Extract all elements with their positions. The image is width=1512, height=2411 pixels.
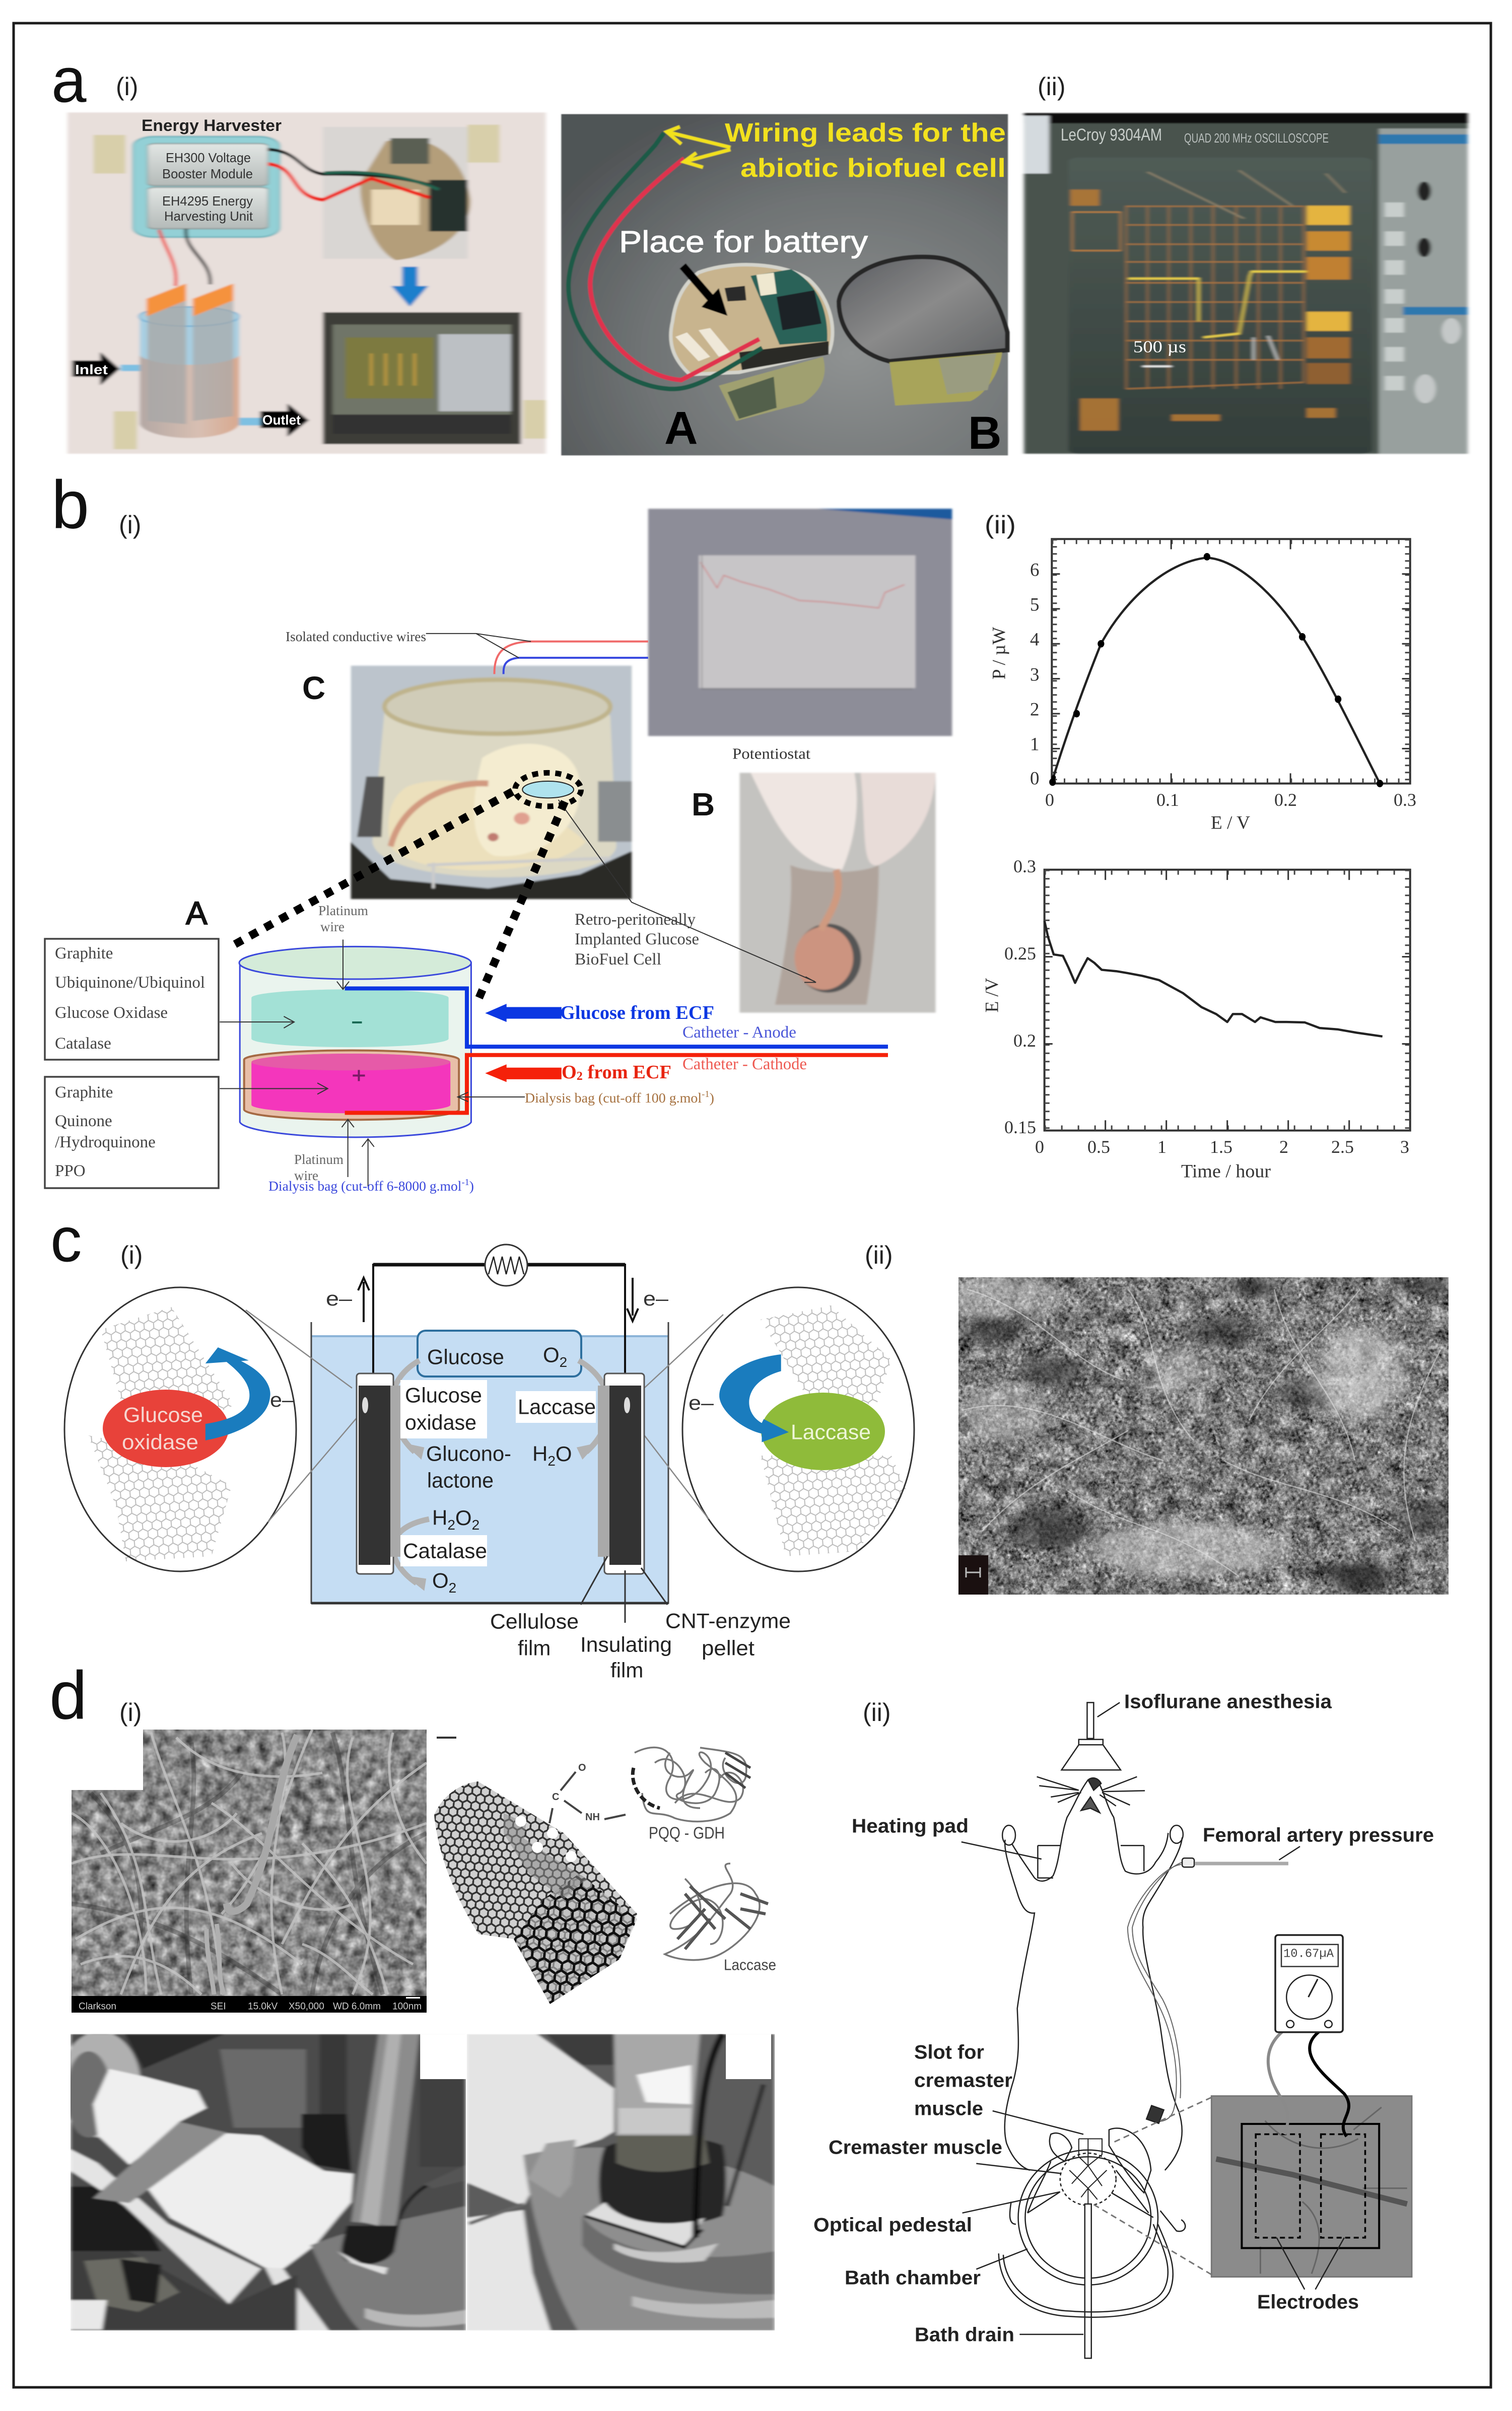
label C: C <box>302 670 325 706</box>
text: abiotic biofuel cell: abiotic biofuel cell <box>740 154 1006 183</box>
substrate box: 2 <box>560 1354 567 1370</box>
text: H2O: 2 <box>547 1453 556 1469</box>
text: CNT-enzyme pellet: CNT-enzyme <box>665 1609 791 1633</box>
text: Dialysis bag 6-8000: ) <box>469 1179 474 1194</box>
chart: power vs voltage: 3 <box>1030 665 1040 685</box>
multimeter <box>1275 1935 1343 2032</box>
text: Glucono-lactone <box>426 1441 511 1492</box>
chart: power vs voltage: 0.1 <box>1156 790 1179 810</box>
text: CNT-enzyme pellet: pellet <box>702 1636 754 1660</box>
text: wire (top): wire <box>320 919 345 934</box>
text: Optical pedestal: Optical pedestal <box>813 2214 972 2236</box>
image: d(i) rat experiment photo right <box>467 2034 775 2330</box>
label A: A <box>186 895 208 931</box>
chart: voltage vs time <box>982 856 1410 1182</box>
text: muscle: muscle <box>914 2098 983 2119</box>
panel label c: c <box>50 1205 82 1275</box>
chart: power vs voltage: 4 <box>1030 630 1040 650</box>
label d(i): (i) <box>119 1698 142 1727</box>
text: wire (bottom): wire <box>294 1168 318 1183</box>
text: Bath chamber: Bath chamber <box>845 2267 981 2289</box>
text: Outlet: Outlet <box>262 412 301 428</box>
text: Catheter - Anode: Catheter - Anode <box>682 1023 796 1042</box>
label a(ii): (ii) <box>1038 73 1066 101</box>
substrate box: O <box>543 1343 560 1367</box>
image: cell schematic <box>220 939 888 1187</box>
multimeter: 10.67µA <box>1283 1947 1334 1961</box>
text: Booster Module: Booster Module <box>162 166 253 181</box>
panel: d(ii) rat surgical schematic <box>813 1691 1434 2358</box>
image: potentiostat photo <box>648 509 952 736</box>
text: H2O: H <box>532 1441 547 1466</box>
chart: power vs voltage: E / V <box>1211 813 1250 833</box>
substrate box <box>418 1331 581 1376</box>
text: implanted cell description: Retro-peritoneally <box>575 911 696 929</box>
chart: power vs voltage: 0.3 <box>1394 790 1416 810</box>
text: Implanted Glucose: Implanted Glucose <box>575 930 699 948</box>
chart: power vs voltage: 0 <box>1030 769 1040 789</box>
protein: Laccase: Laccase <box>724 1956 776 1973</box>
panel: a(i) energy harvester schematic <box>67 112 546 454</box>
text: A: A <box>664 402 698 454</box>
image: d(i) SEM of fibres: WD 6.0mm <box>333 2002 381 2012</box>
text: H2O2: O <box>455 1506 472 1529</box>
text: H2O: O <box>556 1441 572 1466</box>
text: H2O2: 2 <box>447 1517 455 1532</box>
text: Place for battery: Place for battery <box>619 225 868 259</box>
photo inset with electrodes <box>1093 2027 1412 2290</box>
text: Isolated conductive wires: Isolated conductive wires <box>286 629 426 644</box>
substrate box: Glucose <box>427 1345 504 1369</box>
chart: power vs voltage <box>989 539 1416 833</box>
text: Inlet: Inlet <box>75 362 108 377</box>
chart: power vs voltage: 2 <box>1030 699 1040 720</box>
protein: PQQ-GDH <box>633 1748 750 1842</box>
box: cathode materials: PPO <box>55 1162 86 1180</box>
text: 500 µs: 500 µs <box>1133 337 1186 357</box>
label d(ii): (ii) <box>863 1698 891 1727</box>
image: d(i) SEM of fibres: X50,000 <box>289 2002 324 2012</box>
dash mark <box>437 1737 456 1739</box>
chart: voltage vs time: Time / hour <box>1181 1161 1271 1182</box>
text: Wiring leads for the: Wiring leads for the <box>725 118 1006 148</box>
box: cathode materials: Quinone <box>55 1112 112 1130</box>
label c(i): (i) <box>120 1241 143 1269</box>
text: Insulating film: film <box>610 1658 643 1682</box>
label: Glucose oxidase: oxidase <box>405 1410 476 1434</box>
chart: voltage vs time: 1.5 <box>1210 1137 1232 1157</box>
label B: B <box>692 786 715 822</box>
text: Platinum (bottom): Platinum <box>294 1152 343 1167</box>
text: Cremaster muscle: Cremaster muscle <box>829 2137 1002 2159</box>
chart: voltage vs time: 2.5 <box>1331 1137 1354 1157</box>
right magnified circle: Laccase <box>791 1420 871 1443</box>
image: d(i) SEM of fibres: 15.0kV <box>248 2002 278 2012</box>
text: Dialysis bag 100: -1 <box>702 1089 710 1099</box>
chart: voltage vs time: 3 <box>1400 1137 1409 1157</box>
box: anode materials: Glucose Oxidase <box>55 1004 168 1022</box>
text: e- right: e– <box>643 1288 669 1310</box>
box: anode materials: Graphite <box>55 944 113 962</box>
chart: voltage vs time: E /V <box>982 978 1002 1012</box>
protein: Laccase <box>665 1864 776 1973</box>
leader lines and wires <box>235 634 816 998</box>
label: Glucose oxidase: Glucose <box>405 1383 482 1407</box>
chart: voltage vs time: 0.3 <box>1013 856 1036 876</box>
text: EH4295 Energy: EH4295 Energy <box>162 193 253 209</box>
text: Harvesting Unit: Harvesting Unit <box>164 209 253 224</box>
image: functionalized carbon nanotube: NH <box>585 1812 600 1823</box>
box: anode materials <box>45 939 219 1060</box>
box: anode materials: Catalase <box>55 1035 111 1053</box>
text: Glucono-lactone: lactone <box>427 1469 494 1492</box>
text: BioFuel Cell: BioFuel Cell <box>575 950 661 969</box>
text: Insulating film <box>580 1633 672 1682</box>
chart: power vs voltage: 1 <box>1030 734 1040 754</box>
electrode right <box>598 1373 644 1574</box>
panel label b: b <box>51 466 89 543</box>
chart: voltage vs time: 0 <box>1035 1137 1044 1157</box>
right magnified circle: e– <box>689 1392 714 1414</box>
text: Heating pad: Heating pad <box>852 1815 969 1837</box>
image: rat in dome photo <box>351 666 632 899</box>
chart: power vs voltage: 0 <box>1045 790 1054 810</box>
text: cremaster: cremaster <box>914 2070 1012 2091</box>
text: LeCroy 9304AM: LeCroy 9304AM <box>1061 125 1162 145</box>
chart: power vs voltage: 0.2 <box>1274 790 1297 810</box>
text: Dialysis bag 6-8000: Dialysis bag (cut-off 6-8000 g.mol <box>268 1179 457 1194</box>
leader lines <box>581 1556 667 1623</box>
text: Platinum (top): Platinum <box>318 903 368 918</box>
chart: voltage vs time: 0.5 <box>1087 1137 1110 1157</box>
text: Insulating film: Insulating <box>580 1633 672 1656</box>
text: Cellulose film: film <box>518 1636 551 1660</box>
text: CNT-enzyme pellet <box>665 1609 791 1660</box>
image: d(i) rat experiment photo left <box>59 2032 466 2330</box>
protein: PQQ-GDH: PQQ - GDH <box>649 1823 725 1842</box>
text: Slot for: Slot for <box>914 2042 984 2063</box>
chart: voltage vs time: 0.25 <box>1004 943 1036 963</box>
text: Dialysis bag 100: Dialysis bag (cut-off 100 g.mol <box>525 1090 696 1106</box>
text: Electrodes: Electrodes <box>1257 2292 1359 2313</box>
text: Energy Harvester: Energy Harvester <box>142 116 282 134</box>
text: O2: O <box>432 1568 449 1593</box>
text: Femoral artery pressure: Femoral artery pressure <box>1203 1824 1434 1846</box>
image: d(i) SEM of fibres: 100nm <box>392 2002 422 2012</box>
image: functionalized carbon nanotube: O <box>578 1762 586 1773</box>
text: O2 from ECF: O <box>562 1062 577 1083</box>
box: cathode materials: Graphite <box>55 1083 113 1101</box>
zoom lines <box>246 1310 723 1522</box>
reaction arrows <box>392 1360 608 1591</box>
right magnified circle <box>682 1287 914 1571</box>
text: e- left: e– <box>326 1288 353 1310</box>
text: Bath drain: Bath drain <box>915 2324 1014 2346</box>
box: cathode materials: /Hydroquinone <box>55 1133 156 1151</box>
text: O2: 2 <box>449 1579 456 1596</box>
image: d(i) SEM of fibres <box>72 1730 427 2013</box>
text: Isoflurane anesthesia: Isoflurane anesthesia <box>1124 1691 1332 1712</box>
text: Cellulose film: Cellulose <box>490 1610 579 1633</box>
chart: voltage vs time: 0.15 <box>1004 1117 1036 1137</box>
text: O2 from ECF: 2 <box>577 1070 583 1083</box>
label a(i): (i) <box>116 73 138 101</box>
panel label d: d <box>49 1657 87 1734</box>
label: Laccase: Laccase <box>518 1395 596 1418</box>
label: Glucose oxidase <box>400 1380 487 1438</box>
text: O2 from ECF: from ECF <box>583 1062 671 1083</box>
rat line drawing <box>961 1702 1300 2358</box>
left magnified circle: Glucose <box>123 1403 203 1426</box>
image: d(i) SEM of fibres: Clarkson <box>79 2002 116 2012</box>
chart: voltage vs time: 0.2 <box>1013 1030 1036 1051</box>
label c(ii): (ii) <box>865 1241 893 1269</box>
image: glucose cell in gloved fingers photo <box>740 773 936 1013</box>
panel: c(i) enzymatic cell diagram <box>64 1245 914 1682</box>
left magnified circle: oxidase <box>122 1430 198 1454</box>
label b(ii): (ii) <box>985 511 1016 539</box>
chart: voltage vs time: 1 <box>1157 1137 1166 1157</box>
external circuit <box>358 1245 638 1379</box>
text: Dialysis bag 100: ) <box>710 1090 714 1106</box>
panel: a(i) pacemaker photo <box>561 114 1008 459</box>
panel: b(i) implanted cell diagram <box>45 509 952 1194</box>
electrode left <box>357 1373 400 1574</box>
text: H2O2: H <box>432 1506 447 1529</box>
text: B: B <box>968 407 1001 459</box>
chart: power vs voltage: 6 <box>1030 560 1040 580</box>
text: Cellulose film <box>490 1610 579 1660</box>
chart: power vs voltage: 5 <box>1030 594 1040 615</box>
text: Potentiostat: Potentiostat <box>732 744 810 763</box>
image: functionalized carbon nanotube: C <box>552 1792 559 1803</box>
chart: voltage vs time: 2 <box>1279 1137 1288 1157</box>
image: d(i) SEM of fibres: SEI <box>211 2002 226 2012</box>
text: Catheter - Cathode: Catheter - Cathode <box>682 1055 807 1073</box>
text: H2O2: 2 <box>472 1517 479 1532</box>
panel: a(ii) oscilloscope photo <box>1024 113 1468 454</box>
box: cathode materials <box>45 1077 219 1188</box>
image: c(ii) SEM micrograph <box>945 1275 1451 1595</box>
chart: power vs voltage: P / µW <box>989 627 1009 679</box>
label b(i): (i) <box>119 511 141 539</box>
left magnified circle: e– <box>270 1389 295 1411</box>
image: functionalized carbon nanotube <box>434 1762 637 2004</box>
box: anode materials: Ubiquinone/Ubiquinol <box>55 974 205 992</box>
label: Catalase: Catalase <box>403 1539 487 1562</box>
text: Glucose from ECF: Glucose from ECF <box>560 1002 714 1023</box>
text: QUAD 200 MHz OSCILLOSCOPE: QUAD 200 MHz OSCILLOSCOPE <box>1184 130 1329 146</box>
water bath <box>311 1322 668 1603</box>
text: Dialysis bag 6-8000: -1 <box>461 1177 469 1187</box>
text: EH300 Voltage: EH300 Voltage <box>166 150 251 165</box>
left magnified circle <box>64 1287 296 1571</box>
panel label a: a <box>51 45 87 116</box>
text: Glucono-lactone: Glucono- <box>426 1441 511 1466</box>
